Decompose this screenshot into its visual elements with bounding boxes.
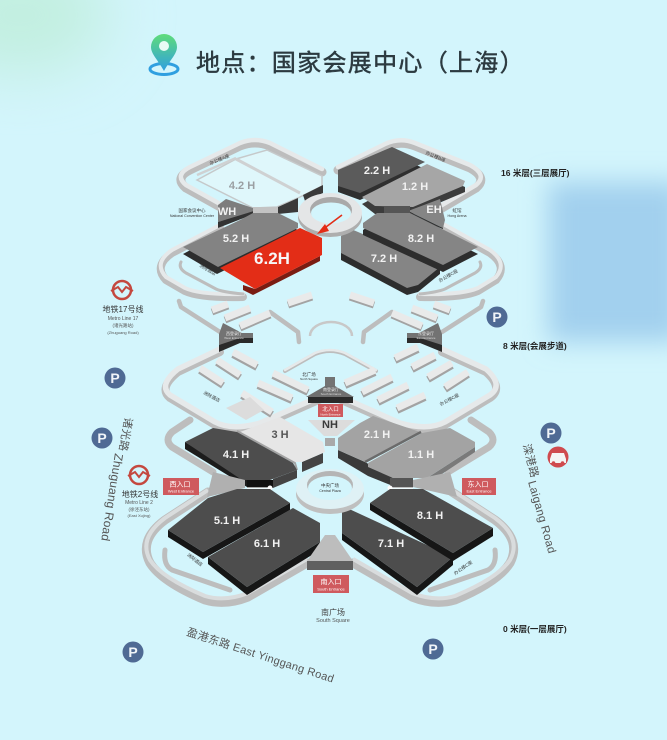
metro line 2: 地铁2号线: [122, 489, 158, 499]
north entrance sign: North Entrance: [320, 412, 341, 416]
walkway upper slabs: [212, 295, 450, 328]
road: Zhuguang: [98, 416, 136, 542]
ring: bottom-left lobe: [161, 225, 243, 297]
icon: car: [548, 446, 568, 468]
parking icons: P: [492, 309, 502, 325]
floor: 16m level: [161, 140, 501, 297]
walkway: lower lobes: [166, 349, 496, 430]
hall 7.1H: [342, 508, 453, 595]
east lobby: East Entrance: [417, 336, 436, 340]
parking icons: P: [128, 644, 138, 660]
walkway slabs: [200, 347, 468, 420]
hall 2.1H: [338, 416, 420, 486]
arrow to 6.2H: [317, 215, 342, 234]
labels 8m: [202, 371, 461, 408]
floor: 0m level: [146, 416, 514, 624]
ring: top-right lobe: [338, 140, 481, 208]
title text: 地点：国家会展中心（上海）: [196, 50, 525, 77]
metro line 17: Metro Line 17: [108, 316, 139, 322]
north entrance sign: 北入口: [322, 405, 339, 413]
hall 6.2H highlighted: 6.2H: [254, 249, 290, 268]
west connector: [207, 472, 272, 497]
floor: 8m level: [166, 295, 496, 430]
west entrance sign: [163, 478, 199, 495]
hall 1.2H: [362, 164, 465, 214]
title: [150, 34, 525, 77]
ring: bottom-right lobe: [420, 225, 501, 297]
hall 8.2H: [363, 213, 478, 272]
east entrance sign: East Entrance: [466, 488, 492, 494]
ring: ground lower-right: [353, 490, 514, 602]
hall 6.2H highlighted: [220, 228, 322, 295]
central plaza ring: 中央广场: [321, 482, 339, 489]
south entrance sign: 南入口: [320, 577, 342, 586]
parking icons: P: [546, 425, 556, 441]
hall 8.1H: 8.1 H: [417, 510, 443, 522]
labels 16m: Hong Arena: [448, 214, 466, 218]
hall 1.2H: 1.2 H: [402, 181, 428, 193]
hall 8.1H: [370, 489, 493, 561]
hall 6.1H: 6.1 H: [254, 538, 280, 550]
parking icons: P: [110, 370, 120, 386]
hall EH: EH: [426, 204, 442, 216]
ring: top-left lobe: [181, 140, 322, 208]
metro line 2: (East Xujing): [128, 513, 151, 518]
labels 0m: 洲际酒店: [186, 552, 205, 568]
south lobby: 南登录厅: [323, 386, 339, 392]
labels 16m: 办公楼B座: [425, 149, 447, 164]
west lobby: [219, 323, 253, 352]
east connector: [388, 472, 457, 497]
hall 4.2H: 4.2 H: [229, 180, 255, 192]
hall 4.1H: 4.1 H: [223, 449, 249, 461]
metro line 17: (Zhuguang Road): [107, 330, 139, 335]
labels 16m: 虹馆: [452, 207, 462, 214]
central ring top: [298, 193, 362, 237]
south lobby: South Entrance: [321, 392, 342, 396]
road: Zhuguang: 诸光路: [116, 416, 136, 453]
road: Zhuguang: Zhuguang Road: [98, 453, 126, 542]
road: East Yinggang: 盈港东路 East Yinggang Road: [185, 625, 336, 686]
road: Laigang: 滦港路: [520, 442, 542, 479]
south lobby: [306, 377, 354, 403]
hall 3H: [240, 417, 325, 472]
hall 1.1H: [365, 428, 475, 482]
hall WH: WH: [218, 206, 236, 218]
hall NH: [308, 419, 355, 446]
south square label: 南广场: [321, 607, 345, 617]
west lobby: West Entrance: [224, 336, 244, 340]
icon: location pin: [150, 34, 178, 74]
hall 5.2H: 5.2 H: [223, 233, 249, 245]
hall 2.2H: 2.2 H: [364, 165, 390, 177]
east entrance sign: [462, 478, 496, 495]
hall 2.1H: 2.1 H: [364, 429, 390, 441]
central plaza ring: [296, 469, 364, 536]
labels 16m: National Convention Center: [170, 214, 215, 218]
labels 0m: 办公楼C座: [452, 559, 474, 577]
east entrance sign: 东入口: [468, 480, 488, 488]
label: 0m floor: 0 米层(一层展厅): [503, 624, 567, 634]
metro line 2: Metro Line 2: [125, 500, 153, 506]
south square label: [316, 607, 350, 624]
labels 0m: [186, 552, 474, 577]
walkway: upper lobes: [179, 301, 483, 342]
metro line 17: [103, 281, 143, 335]
hall 7.1H: 7.1 H: [378, 538, 404, 550]
east lobby: 东登录厅: [418, 330, 434, 336]
hall WH: [218, 199, 278, 228]
hall 5.1H: [168, 489, 290, 559]
hall 5.2H: [183, 213, 298, 274]
hall NH: NH: [322, 419, 338, 431]
labels 8m: 北广场: [302, 371, 316, 378]
labels 8m: North Square: [300, 377, 318, 381]
south entrance structure: [307, 535, 353, 570]
hall 5.1H: 5.1 H: [214, 515, 240, 527]
metro line 2: [122, 466, 158, 518]
west lobby: 西登录厅: [226, 330, 242, 336]
hall 4.1H: [185, 428, 297, 488]
metro line 17: 地铁17号线: [103, 304, 143, 314]
hall 6.1H: [208, 508, 320, 595]
labels 16m: 办公楼A座: [208, 152, 231, 167]
metro line 2: (徐泾东站): [128, 506, 150, 513]
labels 16m: 办公楼C座: [437, 267, 460, 284]
hall 7.2H: 7.2 H: [371, 253, 397, 265]
parking icons: P: [97, 430, 107, 446]
hall 3H: 3 H: [271, 429, 289, 441]
hall 2.2H: [338, 147, 425, 200]
label: 16m floor: 16 米层(三层展厅): [501, 168, 570, 178]
road: Laigang: Laigang Road: [525, 480, 557, 555]
road: Laigang: [520, 442, 557, 555]
central plaza ring: Central Plaza: [319, 489, 341, 493]
south square label: South Square: [316, 618, 350, 624]
east lobby: [407, 323, 442, 352]
hall 7.2H: [341, 229, 440, 295]
labels 16m: 国家会议中心: [178, 207, 206, 214]
south entrance sign: [313, 575, 349, 593]
hall 1.1H: 1.1 H: [408, 449, 434, 461]
hall 8.2H: 8.2 H: [408, 233, 434, 245]
labels 8m: 洲际酒店: [202, 389, 222, 404]
ring: ground lower-left: [146, 490, 307, 602]
labels 16m: 洲际酒店: [198, 262, 218, 277]
dark blocks beside 4.2H: [278, 185, 323, 214]
south entrance sign: South Entrance: [317, 586, 346, 592]
parking icons: P: [428, 641, 438, 657]
west entrance sign: West Entrance: [168, 488, 195, 494]
metro line 17: (诸光路站): [112, 322, 134, 329]
hall 4.2H: [197, 150, 322, 208]
hall EH: [384, 199, 445, 229]
label: 8m floor: 8 米层(会展步道): [503, 341, 567, 351]
north entrance sign: [318, 404, 343, 417]
labels 8m: 办公楼C座: [438, 391, 461, 408]
parking icons: [92, 306, 562, 662]
ring: ground upper-right: [448, 420, 493, 472]
ring: ground upper-left: [168, 420, 213, 472]
west entrance sign: 西入口: [170, 480, 190, 488]
labels 16m: [170, 149, 466, 284]
